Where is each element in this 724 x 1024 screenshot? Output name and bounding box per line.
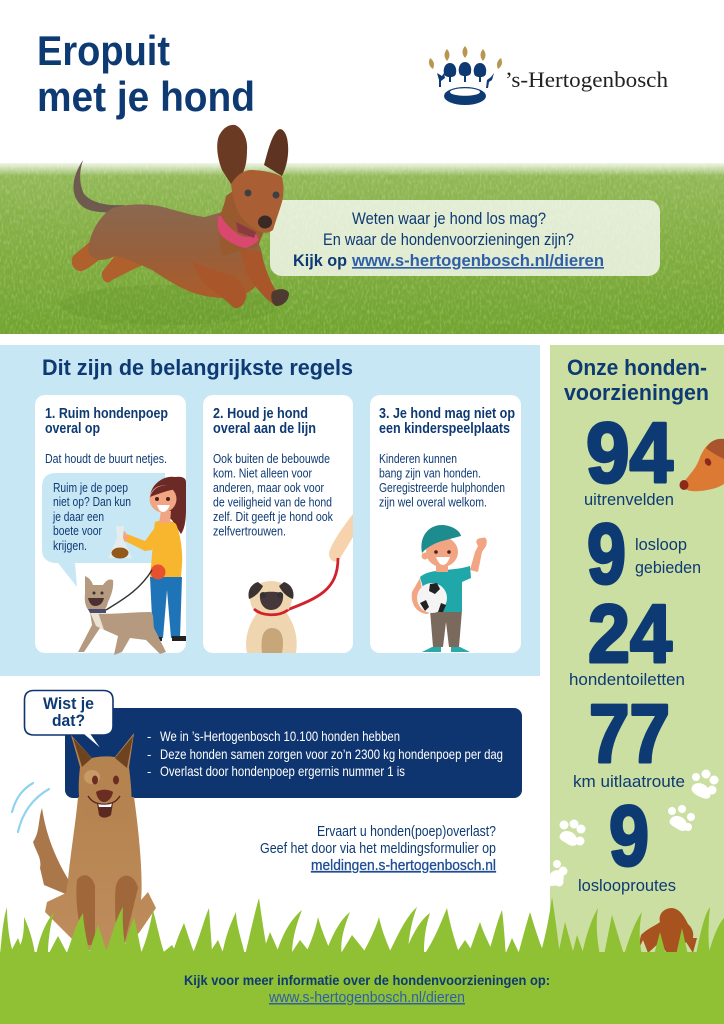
- illustration: pug: [246, 581, 297, 653]
- illustration: woman with poop bag: [106, 477, 186, 641]
- speech bubble: fine: je daar een: [52, 509, 104, 524]
- speech bubble: fine: Ruim je de poep: [53, 480, 128, 495]
- icon: poop bag: [108, 526, 132, 558]
- card 1: overal op: [45, 420, 100, 437]
- logo: 's-Hertogenbosch: [429, 46, 668, 105]
- card 2: Ook buiten de bebouwde: [213, 451, 330, 466]
- stat: 9 losloop gebieden: 9: [587, 507, 626, 602]
- footer: www.s-hertogenbosch.nl/dieren: [268, 989, 465, 1006]
- stat: 24 hondentoiletten: 24: [588, 587, 672, 680]
- panel: rules: [0, 345, 540, 676]
- stat: 94 uitrenvelden: uitrenvelden: [584, 490, 674, 509]
- card 3: 3. Je hond mag niet op: [379, 405, 515, 422]
- card 3: [370, 395, 521, 653]
- speech bubble: wist je dat: dat?: [52, 711, 85, 730]
- stat: 9 losloop gebieden: [587, 507, 701, 602]
- card 3: een kinderspeelplaats: [379, 420, 510, 437]
- text: report nuisance: meldingen.s-hertogenbosch.nl: [311, 857, 496, 874]
- panel: did you know: -: [147, 747, 151, 762]
- photo: grass field: [0, 160, 724, 334]
- card 2: zelf. Dit geeft je hond ook: [213, 509, 333, 524]
- card 2: overal aan de lijn: [213, 420, 316, 437]
- speech bubble: fine: [42, 473, 165, 587]
- logo: 's-Hertogenbosch: ’s-Hertogenbosch: [505, 67, 668, 92]
- card 2: de veiligheid van de hond: [213, 494, 332, 510]
- speech bubble: fine: niet op? Dan kun: [53, 494, 131, 509]
- speech bubble: wist je dat: [24, 690, 113, 752]
- card 1: 1. Ruim hondenpoep: [45, 405, 168, 422]
- stat: 77 km uitlaatroute: km uitlaatroute: [573, 772, 685, 791]
- panel: did you know: -: [147, 729, 151, 744]
- stat: 9 looslooproutes: 9: [609, 789, 649, 884]
- stat: 77 km uitlaatroute: 77: [589, 687, 670, 780]
- stat: 9 losloop gebieden: gebieden: [635, 558, 701, 577]
- card 3: Geregistreerde hulphonden: [379, 480, 505, 495]
- speech bubble: wist je dat: Wist je: [43, 694, 94, 713]
- card 3: bang zijn van honden.: [379, 466, 481, 480]
- card 1: Dat houdt de buurt netjes.: [45, 451, 167, 466]
- callout: website: En waar de hondenvoorzieningen zijn?: [323, 231, 574, 249]
- speech bubble: fine: boete voor: [53, 523, 103, 538]
- head: [71, 733, 134, 822]
- body: [45, 797, 156, 950]
- stat: 9 looslooproutes: loslooproutes: [578, 876, 676, 895]
- stat: 24 hondentoiletten: hondentoiletten: [569, 670, 685, 689]
- icon: dog head peeking: [680, 439, 724, 491]
- panel: did you know: -: [147, 764, 151, 779]
- heading: facilities: [564, 355, 709, 405]
- card 2: [203, 395, 353, 653]
- icon: crown: [429, 46, 502, 105]
- text: report nuisance: Ervaart u honden(poep)overlast?: [317, 823, 496, 840]
- tail: [33, 808, 70, 895]
- illustration: small dog on leash: [78, 576, 166, 655]
- callout: website: [270, 200, 660, 276]
- panel: did you know: We in ’s-Hertogenbosch 10.100 honden hebben: [160, 728, 400, 744]
- stat: 94 uitrenvelden: 94: [586, 406, 673, 501]
- callout: website: Kijk op: [293, 252, 347, 270]
- panel: did you know: Overlast door hondenpoep ergernis nummer 1 is: [160, 763, 405, 779]
- title: Eropuit: [37, 27, 170, 74]
- card 2: kom. Niet alleen voor: [213, 466, 313, 480]
- callout: website: Weten waar je hond los mag?: [352, 210, 546, 228]
- card 3: Kinderen kunnen: [379, 451, 457, 466]
- heading: facilities: voorzieningen: [564, 380, 709, 405]
- title: met je hond: [37, 73, 255, 120]
- card 3: zijn wel overal welkom.: [379, 494, 487, 510]
- card 2: 2. Houd je hond: [213, 405, 308, 422]
- card 2: zelfvertrouwen.: [213, 524, 286, 538]
- stat: 9 looslooproutes: [578, 789, 676, 895]
- text: report nuisance: [260, 823, 496, 874]
- card 1: [35, 395, 186, 655]
- heading: facilities: Onze honden-: [567, 355, 707, 380]
- icons: white paw prints: [550, 770, 718, 886]
- stat: 9 losloop gebieden: losloop: [635, 535, 687, 554]
- illustration: hand with leash: [287, 514, 353, 610]
- footer: Kijk voor meer informatie over de hondenvoorzieningen op:: [184, 972, 550, 988]
- text: report nuisance: Geef het door via het meldingsformulier op: [260, 840, 496, 857]
- icon: dog poop: [637, 908, 697, 955]
- illustration: sitting dog: [12, 733, 156, 950]
- title: [37, 27, 255, 120]
- footer: [184, 972, 550, 1006]
- heading: rules: Dit zijn de belangrijkste regels: [42, 355, 353, 380]
- panel: dog facilities: [550, 345, 724, 965]
- arcs: wagging tail: [12, 783, 49, 832]
- speech bubble: fine: krijgen.: [53, 538, 87, 553]
- photo: running dachshund: [72, 125, 289, 308]
- card 2: anderen, maar ook voor: [213, 480, 325, 495]
- illustration: boy with ball: [412, 525, 487, 652]
- panel: did you know: [65, 708, 522, 798]
- grass band with blades: [0, 897, 724, 1024]
- panel: did you know: Deze honden samen zorgen voor zo’n 2300 kg hondenpoep per dag: [160, 746, 503, 762]
- callout: website: www.s-hertogenbosch.nl/dieren: [351, 252, 604, 270]
